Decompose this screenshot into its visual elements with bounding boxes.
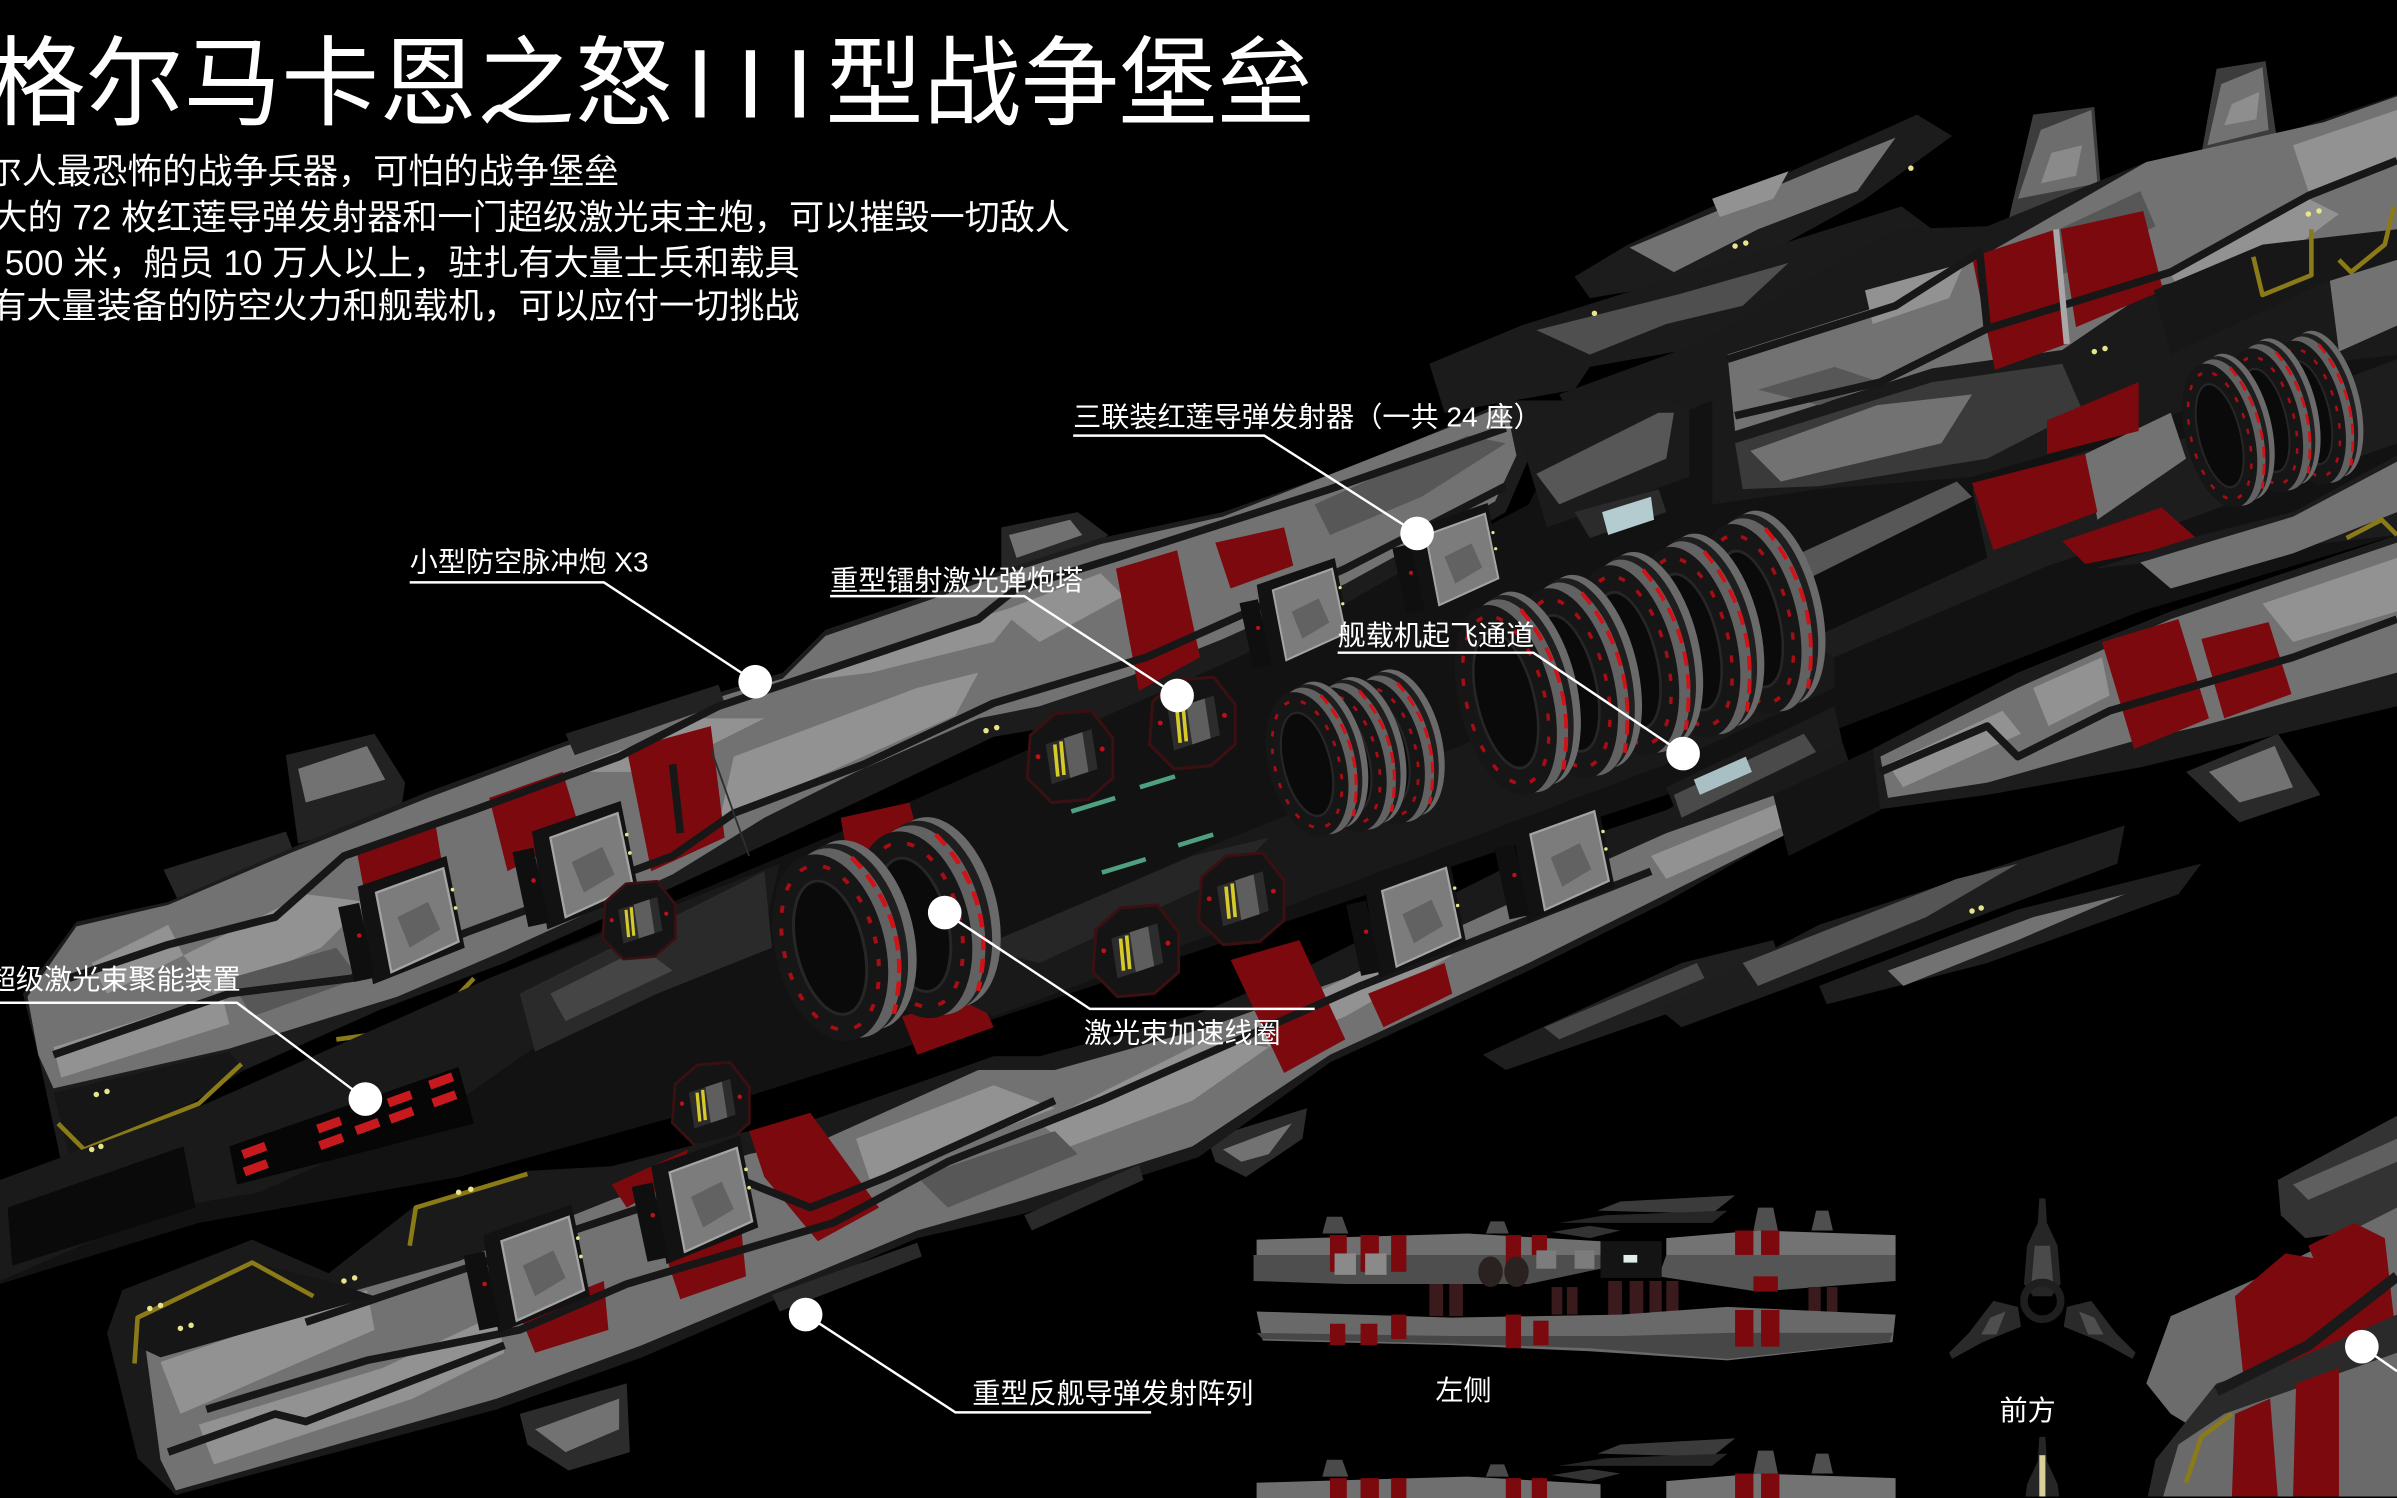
side view second copy [1257, 1438, 1896, 1498]
callout: laser accelerator coil [928, 896, 1315, 1048]
title [0, 29, 1315, 139]
intro text block: 大的 72 枚红莲导弹发射器和一门超级激光束主炮，可以摧毁一切敌人 [0, 198, 1070, 237]
coils: four groups of laser accelerator rings [752, 323, 2378, 1053]
callout: triple missile launcher [1073, 401, 1542, 550]
side view diagram [1254, 1195, 1896, 1360]
callout: triple missile launcher: 三联装红莲导弹发射器（一共 24 座） [1073, 401, 1542, 432]
front view second copy [2026, 1437, 2059, 1496]
label: left side: 左侧 [1435, 1375, 1492, 1406]
callout: anti-air pulse guns: 小型防空脉冲炮 X3 [410, 547, 649, 578]
callout: anti-ship missile array [789, 1298, 1253, 1412]
callout: carrier launch channel: 舰载机起飞通道 [1338, 620, 1534, 651]
callout dot on cropped ship [2345, 1330, 2397, 1371]
upper rear hull [1559, 95, 2397, 504]
title: 格尔马卡恩之怒 [0, 29, 673, 139]
indicator lights [89, 165, 2322, 1331]
callout: anti-air pulse guns [410, 547, 772, 699]
title: I [786, 29, 813, 139]
callout: carrier launch channel [1338, 620, 1700, 770]
callout: laser accelerator coil: 激光束加速线圈 [1084, 1017, 1281, 1048]
nose of central spine with red lights [0, 604, 1834, 1281]
lower wing shards [1483, 825, 2201, 1070]
lower hull [107, 706, 1850, 1495]
callout: heavy laser turret [830, 565, 1194, 712]
intro text block [0, 152, 1070, 326]
title: I [737, 29, 764, 139]
front view diagram [1949, 1198, 2136, 1359]
intro text block: 尔人最恐怖的战争兵器，可怕的战争堡垒 [0, 152, 619, 191]
label: front: 前方 [2000, 1395, 2056, 1426]
rear lower hull [1773, 456, 2397, 856]
intro text block: 500 米，船员 10 万人以上，驻扎有大量士兵和载具 [5, 244, 800, 283]
mid right hull section [1506, 359, 2397, 657]
callout: heavy laser turret: 重型镭射激光弹炮塔 [830, 565, 1083, 596]
central dark spine [0, 107, 2397, 1284]
upper fins and wings [1429, 61, 2278, 413]
callout: laser focusing device [0, 964, 382, 1116]
intro text block: 有大量装备的防空火力和舰载机，可以应付一切挑战 [0, 287, 800, 326]
cropped close-up of another ship [2146, 1116, 2397, 1496]
upper front hull with stripes [23, 400, 1529, 1162]
title: I [686, 29, 714, 139]
title: 型战争堡垒 [825, 29, 1315, 139]
callout: anti-ship missile array: 重型反舰导弹发射阵列 [972, 1378, 1253, 1409]
